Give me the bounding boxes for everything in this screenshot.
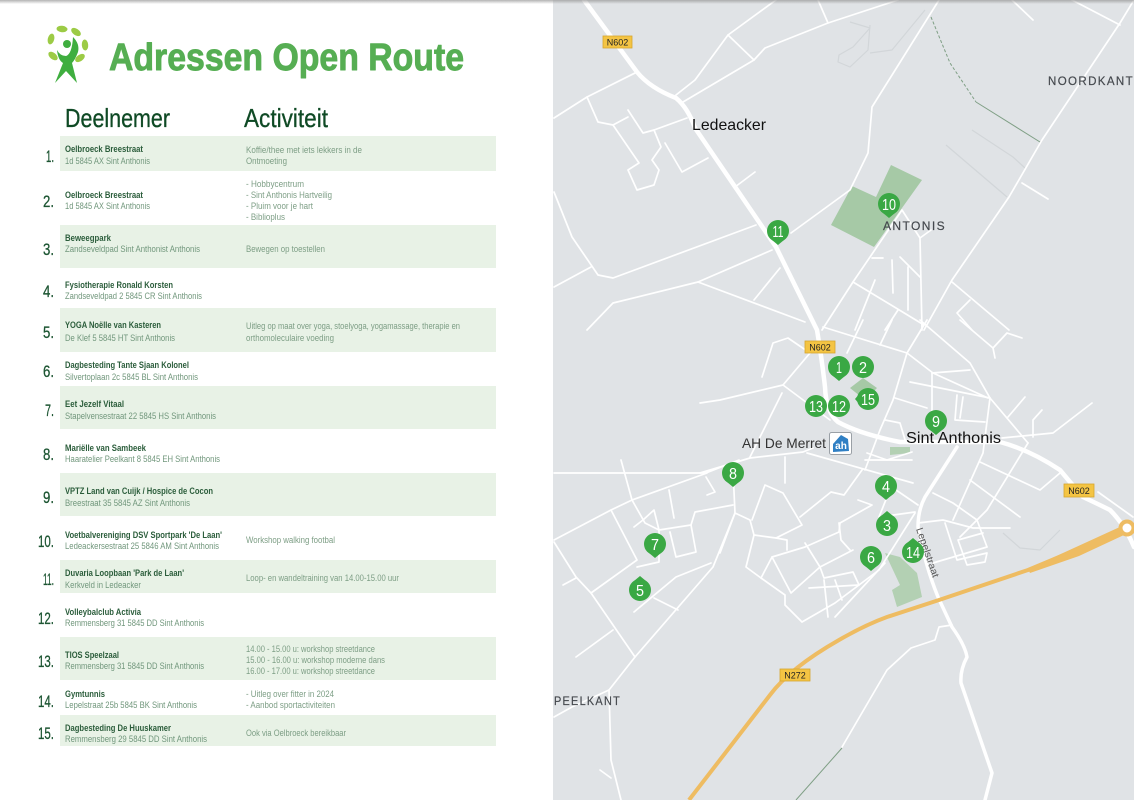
row 13: TIOS Speelzaal bbox=[65, 650, 119, 660]
map: road shields bbox=[603, 36, 1094, 681]
row 2: Oelbroeck Breestraat bbox=[65, 190, 143, 200]
row 13: 13. bbox=[38, 652, 54, 671]
row 4: 4. bbox=[43, 282, 54, 301]
row 11: Loop- en wandeltraining van 14.00-15.00 uur bbox=[246, 573, 399, 583]
title: Adressen Open Route bbox=[109, 37, 464, 79]
row 11: Kerkveld in Ledeacker bbox=[65, 580, 141, 590]
map: N602 main road bbox=[584, 0, 1134, 547]
map: road shields: N272 bbox=[784, 670, 806, 680]
row 13: 16.00 - 17.00 u: workshop streetdance bbox=[246, 666, 375, 676]
row 13: 15.00 - 16.00 u: workshop moderne dans bbox=[246, 655, 385, 665]
row 10 bbox=[38, 530, 335, 551]
row 11 bbox=[43, 560, 496, 593]
row 15: Dagbesteding De Huuskamer bbox=[65, 723, 171, 733]
map pin 15 bbox=[855, 388, 879, 410]
map: place labels bbox=[554, 74, 1134, 708]
row 2 bbox=[43, 179, 332, 222]
row 12: Remmensberg 31 5845 DD Sint Anthonis bbox=[65, 618, 204, 628]
heading: Activiteit: Activiteit bbox=[244, 103, 329, 133]
row 15: 15. bbox=[38, 724, 54, 743]
row 1: Oelbroeck Breestraat bbox=[65, 144, 143, 154]
row 13 bbox=[38, 637, 496, 680]
row 5: YOGA Noëlle van Kasteren bbox=[65, 320, 161, 330]
row 8: Haaratelier Peelkant 8 5845 EH Sint Anthonis bbox=[65, 454, 220, 464]
row 4: Zandseveldpad 2 5845 CR Sint Anthonis bbox=[65, 291, 202, 301]
map: place labels: Sint Anthonis bbox=[906, 430, 1001, 447]
icon: Albert Heijn bbox=[830, 432, 852, 454]
row 6: 6. bbox=[43, 362, 54, 381]
map pin 15: 15 bbox=[861, 392, 875, 409]
row 15 bbox=[38, 715, 496, 746]
row 14: - Uitleg over fitter in 2024 bbox=[246, 689, 334, 699]
row 3: Bewegen op toestellen bbox=[246, 244, 325, 254]
map: local roads bbox=[554, 0, 1134, 800]
map pin 6 bbox=[860, 546, 882, 571]
row 3 bbox=[43, 225, 496, 268]
row 9 bbox=[43, 473, 496, 516]
row 9: 9. bbox=[43, 488, 54, 507]
map pin 8: 8 bbox=[729, 466, 737, 483]
row 5: 5. bbox=[43, 323, 54, 342]
row 11: 11. bbox=[43, 570, 54, 589]
map pin 5: 5 bbox=[636, 583, 644, 600]
row 3: 3. bbox=[43, 240, 54, 259]
map pin 11 bbox=[767, 220, 789, 245]
row 1 bbox=[46, 136, 496, 171]
row 9: VPTZ Land van Cuijk / Hospice de Cocon bbox=[65, 486, 213, 496]
map pin 12 bbox=[828, 395, 850, 417]
row 10: Ledeackersestraat 25 5846 AM Sint Anthonis bbox=[65, 541, 219, 551]
row 12 bbox=[38, 607, 204, 628]
row 2: 2. bbox=[43, 192, 54, 211]
row 10: Workshop walking footbal bbox=[246, 535, 335, 545]
row 3: Beweegpark bbox=[65, 233, 112, 243]
map pin 1 bbox=[828, 356, 850, 381]
map: road shields: N602 bbox=[607, 38, 628, 48]
row 2: - Pluim voor je hart bbox=[246, 201, 313, 211]
row 1: 1. bbox=[46, 147, 54, 166]
row 12: Volleybalclub Activia bbox=[65, 607, 142, 617]
map pin 7 bbox=[644, 533, 666, 558]
map pin 9 bbox=[925, 410, 947, 435]
row 15: Remmensberg 29 5845 DD Sint Anthonis bbox=[65, 734, 207, 744]
row 8 bbox=[43, 443, 220, 464]
row 8: Mariëlle van Sambeek bbox=[65, 443, 147, 453]
map: place labels: PEELKANT bbox=[554, 694, 621, 708]
map: Lepelstraat road bbox=[918, 447, 992, 800]
row 13: 14.00 - 15.00 u: workshop streetdance bbox=[246, 644, 375, 654]
row 4: Fysiotherapie Ronald Korsten bbox=[65, 280, 173, 290]
row 6: Silvertoplaan 2c 5845 BL Sint Anthonis bbox=[65, 372, 198, 382]
row 13: Remmensberg 31 5845 DD Sint Anthonis bbox=[65, 661, 204, 671]
map pin 14 bbox=[902, 538, 924, 563]
row 3: Zandseveldpad Sint Anthonist Anthonis bbox=[65, 244, 200, 254]
map pin 11: 11 bbox=[772, 224, 784, 241]
map pin 13 bbox=[805, 395, 827, 417]
map pin 12: 12 bbox=[832, 399, 846, 416]
map pin 9: 9 bbox=[932, 414, 940, 431]
icon: Albert Heijn: ah bbox=[835, 441, 847, 452]
map: parks bbox=[831, 165, 922, 607]
map pin 3: 3 bbox=[883, 518, 891, 535]
map: green trail bbox=[796, 17, 1040, 800]
row 10: Voetbalvereniging DSV Sportpark 'De Laan' bbox=[65, 530, 222, 540]
icon: open route logo bbox=[46, 25, 89, 83]
row 12: 12. bbox=[38, 609, 54, 628]
heading: Deelnemer: Deelnemer bbox=[65, 103, 170, 133]
row 14: Lepelstraat 25b 5845 BK Sint Anthonis bbox=[65, 700, 197, 710]
row 8: 8. bbox=[43, 445, 54, 464]
row 1: Ontmoeting bbox=[246, 156, 287, 166]
map: place labels: ANTONIS bbox=[883, 219, 946, 233]
row 6 bbox=[43, 360, 198, 382]
map pin 13: 13 bbox=[809, 399, 823, 416]
map pin 2: 2 bbox=[859, 360, 867, 377]
map pin 14: 14 bbox=[906, 545, 920, 562]
row 2: - Hobbycentrum bbox=[246, 179, 304, 189]
map pin 1: 1 bbox=[836, 360, 842, 377]
row 14: - Aanbod sportactiviteiten bbox=[246, 700, 335, 710]
map pin 10: 10 bbox=[882, 197, 896, 214]
map pin 7: 7 bbox=[651, 537, 659, 554]
row 10: 10. bbox=[38, 532, 54, 551]
row 7: Eet Jezelf Vitaal bbox=[65, 399, 124, 409]
map: N272 road bbox=[689, 522, 1134, 800]
row 1: 1d 5845 AX Sint Anthonis bbox=[65, 156, 150, 166]
map pin 3 bbox=[876, 511, 898, 536]
map pin 2 bbox=[852, 356, 874, 378]
row 7 bbox=[45, 386, 496, 429]
map: road shields: N602 bbox=[1068, 486, 1090, 496]
map: place labels: AH De Merret bbox=[742, 435, 826, 451]
map: faint paths bbox=[838, 10, 1060, 550]
row 6: Dagbesteding Tante Sjaan Kolonel bbox=[65, 360, 189, 370]
row 2: - Sint Anthonis Hartveilig bbox=[246, 190, 332, 200]
map pin 8 bbox=[722, 462, 744, 487]
panel: map bbox=[553, 0, 1134, 800]
row 14 bbox=[38, 689, 335, 711]
row 1: Koffie/thee met iets lekkers in de bbox=[246, 145, 362, 155]
row 11: Duvaria Loopbaan 'Park de Laan' bbox=[65, 568, 184, 578]
map pin 10 bbox=[878, 193, 900, 218]
row 5 bbox=[43, 308, 496, 352]
row 14: 14. bbox=[38, 692, 54, 711]
map pin 4: 4 bbox=[882, 479, 890, 496]
row 9: Breestraat 35 5845 AZ Sint Anthonis bbox=[65, 498, 190, 508]
row 7: Stapelvensestraat 22 5845 HS Sint Anthonis bbox=[65, 411, 216, 421]
panel: address list bbox=[0, 0, 553, 800]
map pin 6: 6 bbox=[867, 550, 875, 567]
row 5: orthomoleculaire voeding bbox=[246, 333, 334, 343]
row 5: De Klef 5 5845 HT Sint Anthonis bbox=[65, 333, 175, 343]
row 7: 7. bbox=[45, 401, 54, 420]
row 4 bbox=[43, 280, 202, 301]
row 2: 1d 5845 AX Sint Anthonis bbox=[65, 201, 150, 211]
row 15: Ook via Oelbroeck bereikbaar bbox=[246, 728, 346, 738]
map: place labels: Lepelstraat bbox=[913, 526, 941, 579]
map: place labels: Ledeacker bbox=[692, 117, 767, 134]
row 5: Uitleg op maat over yoga, stoelyoga, yogamassage, therapie en bbox=[246, 321, 460, 331]
row 14: Gymtunnis bbox=[65, 689, 105, 699]
map: road shields: N602 bbox=[809, 342, 831, 352]
map pin 5 bbox=[629, 576, 651, 601]
row 2: - Biblioplus bbox=[246, 212, 285, 222]
map pin 4 bbox=[875, 475, 897, 500]
